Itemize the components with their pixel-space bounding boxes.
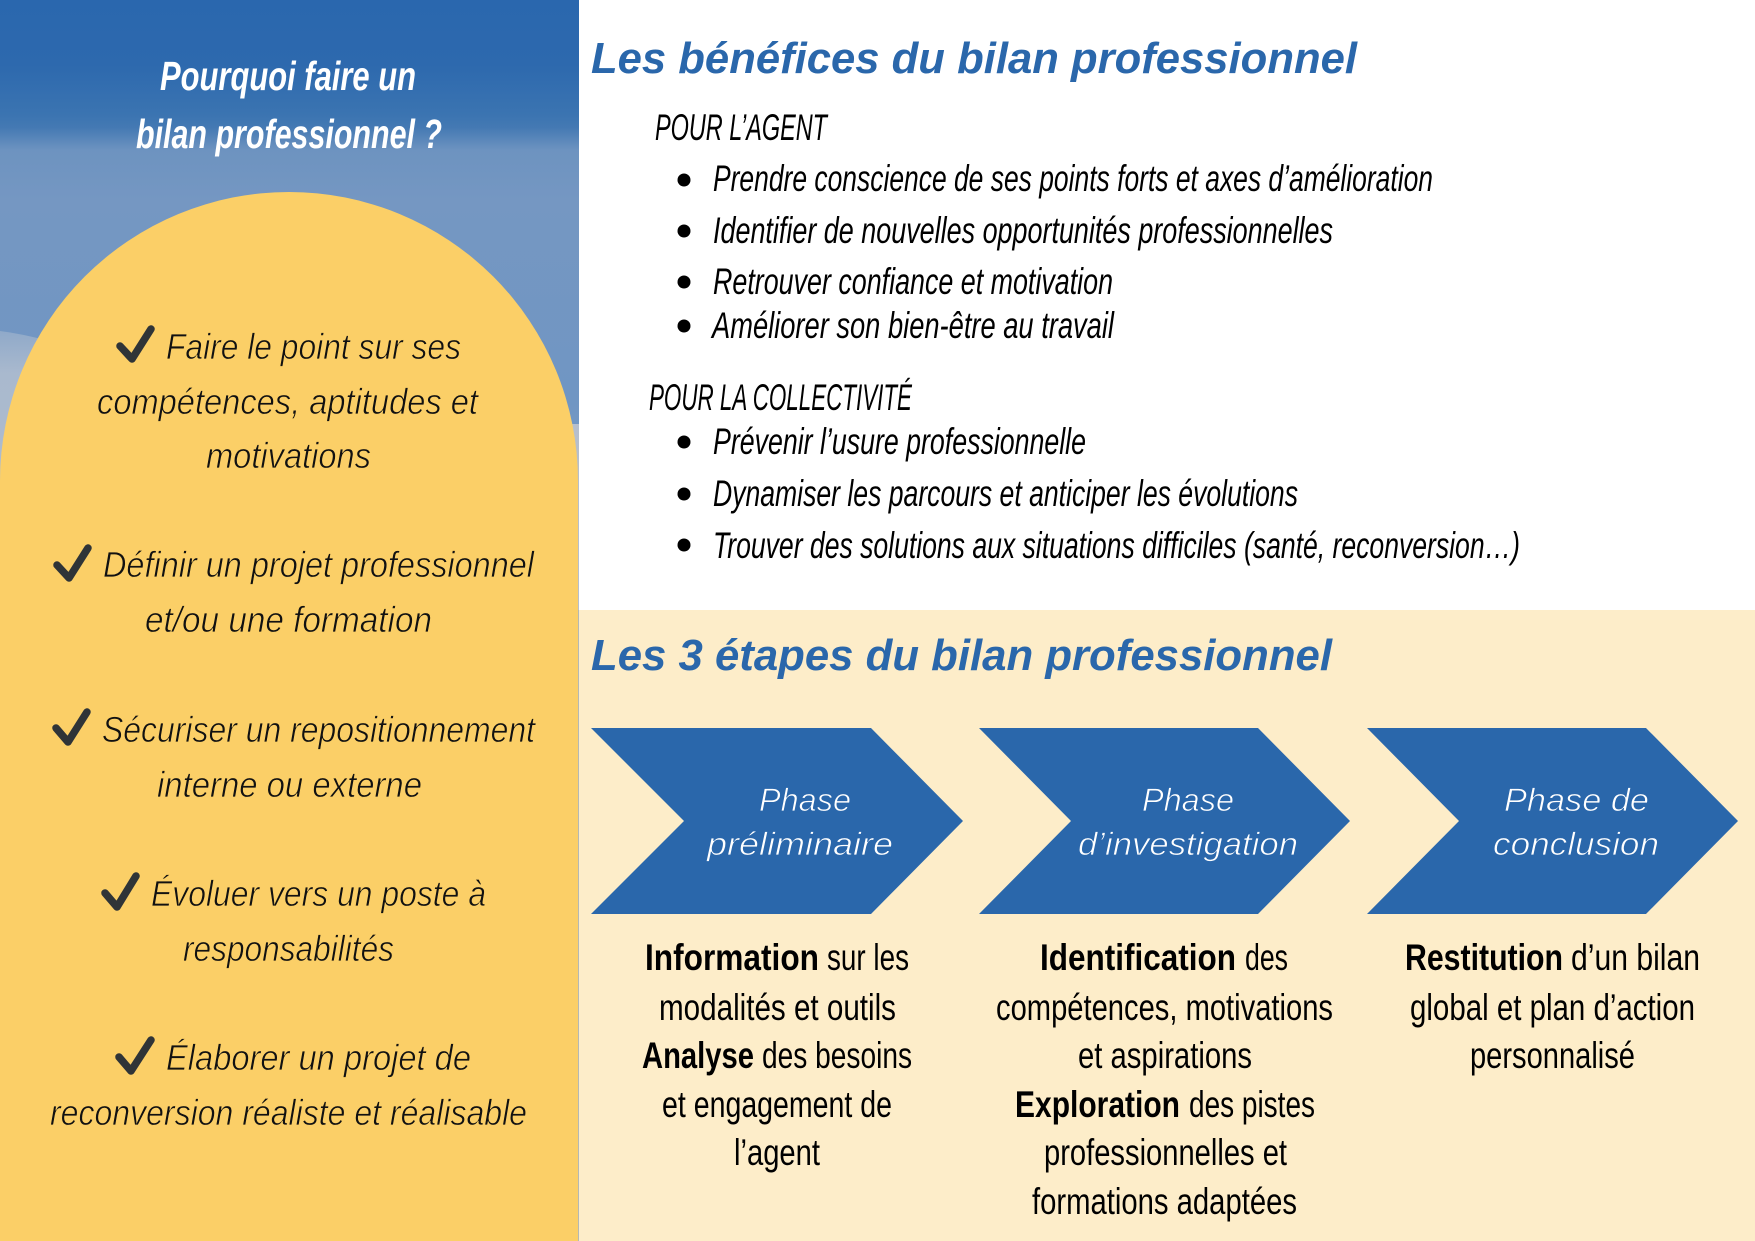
checklist item 5: reconversion réaliste et réalisable: [50, 1092, 527, 1133]
text block: phase 2 description: et aspirations: [1078, 1035, 1252, 1076]
checklist item 1: motivations: [206, 435, 371, 476]
icon: check mark: [119, 1040, 151, 1071]
text block: phase 3 description: Restitution: [1405, 937, 1563, 978]
text block: pour la collectivité: [649, 377, 1520, 566]
text block: phase 3 description: d’un bilan: [1571, 937, 1700, 978]
subheading: pour l'agent: POUR L’AGENT: [655, 107, 829, 148]
arrow: phase d'investigation: [979, 728, 1350, 914]
arrow: phase de conclusion: [1367, 728, 1738, 914]
checklist item 2: [57, 544, 535, 640]
text block: phase 1 description: [642, 937, 912, 1173]
panel: watercolor sky background: [0, 0, 579, 620]
text block: phase 1 description: et engagement de: [662, 1084, 892, 1125]
text block: phase 3 description: personnalisé: [1470, 1035, 1635, 1076]
text block: phase 2 description: Identification: [1040, 937, 1236, 978]
icon: check mark: [105, 876, 136, 907]
text block: pour l'agent: Identifier de nouvelles opportunités professionnelles: [713, 210, 1333, 251]
arrow: phase préliminaire: préliminaire: [706, 826, 893, 862]
icon: check mark: [120, 329, 151, 359]
title: pourquoi faire un bilan: Pourquoi faire un: [160, 53, 416, 99]
checklist item 3: Sécuriser un repositionnement: [102, 709, 537, 750]
checklist item 1: Faire le point sur ses: [166, 326, 461, 367]
icon: check mark: [57, 548, 88, 578]
arrow: phase de conclusion: Phase de: [1504, 782, 1649, 818]
checklist item 3: [56, 709, 537, 805]
text block: phase 2 description: compétences, motivations: [996, 987, 1333, 1028]
checklist item 5: [50, 1037, 527, 1133]
text block: pour l'agent: Retrouver confiance et motivation: [713, 261, 1113, 302]
arrow: phase d'investigation: d’investigation: [1078, 826, 1298, 862]
text block: pour l'agent: [655, 107, 1433, 346]
text block: phase 2 description: des: [1245, 937, 1288, 978]
checklist item 4: [105, 873, 486, 969]
checklist item 3: interne ou externe: [157, 764, 422, 805]
text block: phase 1 description: l’agent: [734, 1132, 821, 1173]
text block: pour l'agent: Améliorer son bien-être au travail: [711, 305, 1115, 346]
text block: phase 1 description: sur les: [827, 937, 909, 978]
arrow: phase d'investigation: Phase: [1142, 782, 1234, 818]
checklist item 1: [97, 326, 480, 476]
arrow: phase préliminaire: [591, 728, 963, 914]
checklist item 4: Évoluer vers un poste à: [151, 873, 486, 914]
text block: pour la collectivité: Prévenir l’usure professionnelle: [713, 421, 1086, 462]
text block: phase 1 description: modalités et outils: [659, 987, 896, 1028]
text block: phase 2 description: professionnelles et: [1044, 1132, 1288, 1173]
text block: phase 2 description: formations adaptées: [1032, 1181, 1297, 1222]
text block: phase 1 description: des besoins: [762, 1035, 912, 1076]
text block: phase 2 description: Exploration: [1015, 1084, 1180, 1125]
text block: phase 2 description: des pistes: [1189, 1084, 1315, 1125]
panel: yellow arch: [0, 192, 578, 1241]
text block: phase 3 description: [1405, 937, 1700, 1076]
panel: stages cream background: [579, 610, 1755, 1241]
text block: phase 1 description: Analyse: [642, 1035, 754, 1076]
title: pourquoi faire un bilan: bilan professionnel ?: [136, 111, 442, 157]
checklist item 2: et/ou une formation: [145, 599, 432, 640]
title: pourquoi faire un bilan: [136, 53, 442, 157]
text block: pour la collectivité: Dynamiser les parcours et anticiper les évolutions: [713, 473, 1298, 514]
icon: check mark: [56, 712, 87, 742]
checklist item 4: responsabilités: [183, 928, 394, 969]
text block: pour l'agent: Prendre conscience de ses points forts et axes d’amélioration: [713, 158, 1433, 199]
arrow: phase préliminaire: Phase: [759, 782, 851, 818]
heading: les bénéfices: Les bénéfices du bilan professionnel: [591, 34, 1358, 83]
subheading: pour la collectivité: POUR LA COLLECTIVITÉ: [649, 377, 913, 418]
checklist item 2: Définir un projet professionnel: [103, 544, 535, 585]
heading: les 3 étapes: Les 3 étapes du bilan professionnel: [591, 631, 1333, 680]
arrow: phase de conclusion: conclusion: [1493, 826, 1659, 862]
text block: phase 2 description: [996, 937, 1333, 1222]
text block: phase 1 description: Information: [645, 937, 819, 978]
checklist item 5: Élaborer un projet de: [166, 1037, 471, 1078]
checklist item 1: compétences, aptitudes et: [97, 381, 480, 422]
